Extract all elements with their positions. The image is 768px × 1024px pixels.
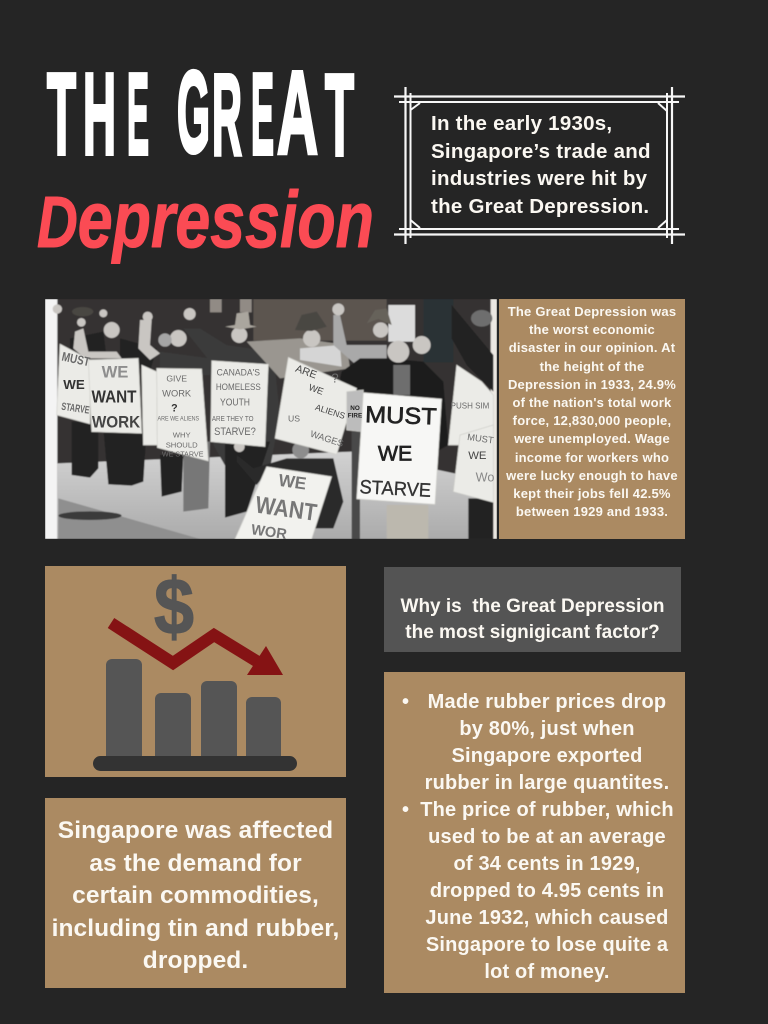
Singapore impact text panel: including tin and rubber, bbox=[52, 914, 339, 942]
placard lettering: WANT bbox=[92, 386, 137, 406]
placard lettering: WORK bbox=[92, 413, 140, 432]
statistics text panel: between 1929 and 1933. bbox=[516, 504, 668, 519]
statistics text panel: disaster in our opinion. At bbox=[509, 340, 675, 355]
placard lettering: STARVE bbox=[359, 477, 432, 502]
placard lettering: NO bbox=[350, 405, 360, 412]
decorative frame bbox=[394, 87, 685, 244]
statistics text panel: kept their jobs fell 42.5% bbox=[513, 486, 671, 501]
placard lettering: WE bbox=[63, 377, 85, 392]
statistics text panel: Depression in 1933, 24.9% bbox=[508, 377, 676, 392]
bullet: price of rubber: of 34 cents in 1929, bbox=[453, 853, 641, 875]
statistics text panel: force, 12,830,000 people, bbox=[513, 413, 671, 428]
placard lettering: ? bbox=[171, 403, 178, 415]
placard lettering: ARE bbox=[294, 363, 318, 382]
statistics text panel: the worst economic bbox=[529, 322, 655, 337]
bullet: rubber prices: rubber in large quantites. bbox=[425, 772, 669, 794]
Singapore impact text panel: Singapore was affected bbox=[58, 817, 333, 844]
placard lettering: WE bbox=[277, 470, 308, 494]
intro text bbox=[431, 112, 651, 218]
bullet: rubber prices: by 80%, just when bbox=[459, 718, 635, 740]
placard lettering: WAGES bbox=[309, 429, 345, 449]
Singapore impact text panel: certain commodities, bbox=[72, 882, 319, 909]
statistics text panel: of the nation's total work bbox=[512, 395, 672, 410]
Singapore impact text panel: dropped. bbox=[143, 947, 248, 974]
bullet: rubber prices bbox=[402, 691, 669, 794]
placard lettering: WORK bbox=[162, 389, 192, 399]
placard lettering: ARE THEY TO bbox=[212, 414, 254, 423]
hats bbox=[72, 307, 492, 442]
placard lettering: CANADA'S bbox=[217, 368, 260, 378]
placard lettering: SHOULD bbox=[166, 441, 198, 450]
bullet: price of rubber: lot of money. bbox=[484, 961, 610, 983]
chart base bbox=[93, 756, 297, 771]
placard lettering: WE bbox=[307, 382, 325, 397]
bullet: rubber prices: Singapore exported bbox=[451, 745, 643, 767]
rubber price bullet panel: • bbox=[402, 691, 409, 713]
protest photograph bbox=[45, 299, 497, 539]
placard lettering: WE bbox=[378, 442, 412, 466]
panel: falling chart icon bbox=[45, 566, 346, 777]
statistics text panel: income for workers who bbox=[515, 450, 669, 465]
bullet: price of rubber: dropped to 4.95 cents in bbox=[430, 880, 664, 902]
placard lettering: WANT bbox=[254, 492, 319, 527]
statistics text panel bbox=[499, 299, 685, 539]
statistics text panel: were unemployed. Wage bbox=[514, 431, 670, 446]
question heading panel: Why is the Great Depression bbox=[401, 596, 664, 617]
intro text: industries were hit by bbox=[431, 167, 647, 190]
intro text: Singapore’s trade and bbox=[431, 140, 651, 162]
placard lettering: HOMELESS bbox=[216, 382, 261, 392]
bullet: price of rubber bbox=[402, 799, 674, 983]
placard lettering: WE bbox=[102, 362, 128, 381]
bullet: price of rubber: The price of rubber, which bbox=[420, 799, 674, 821]
title line: The Great bbox=[47, 47, 354, 180]
crowd figures bbox=[70, 305, 493, 539]
bullet: rubber prices: Made rubber prices drop bbox=[428, 691, 666, 713]
statistics text panel: the height of the bbox=[540, 359, 644, 374]
bullet: price of rubber: used to be at an average bbox=[428, 826, 666, 848]
placard lettering bbox=[61, 350, 494, 543]
photo background bbox=[45, 299, 497, 539]
rubber price bullet panel bbox=[384, 672, 685, 993]
title bbox=[37, 60, 374, 264]
placard lettering: ? bbox=[331, 370, 339, 385]
placard lettering: WHY bbox=[173, 431, 191, 440]
placard lettering: STARVE bbox=[61, 401, 90, 417]
placard lettering: YOUTH bbox=[220, 398, 250, 409]
placard lettering: STARVE? bbox=[214, 426, 256, 438]
placard lettering: MUST bbox=[61, 350, 91, 369]
question heading panel: the most signigicant factor? bbox=[405, 622, 660, 643]
placard lettering: PUSH SIM bbox=[451, 401, 490, 410]
intro text: the Great Depression. bbox=[431, 194, 649, 218]
question heading panel bbox=[384, 567, 681, 652]
statistics text panel: were lucky enough to have bbox=[506, 468, 678, 483]
bullet: price of rubber: Singapore to lose quite a bbox=[426, 934, 668, 956]
placard lettering: ARE WE ALIENS bbox=[158, 415, 199, 422]
arrow: downward trend bbox=[111, 623, 258, 663]
statistics text panel: The Great Depression was bbox=[508, 304, 676, 319]
bars bbox=[106, 659, 281, 756]
placards bbox=[57, 344, 493, 539]
Singapore impact text panel bbox=[45, 798, 346, 988]
placard lettering: MUST bbox=[467, 432, 494, 446]
placard lettering: FIRE bbox=[348, 413, 362, 420]
rubber price bullet panel: • bbox=[402, 799, 409, 821]
faces and fists bbox=[53, 303, 431, 458]
placard lettering: Wo bbox=[476, 471, 494, 485]
bullet: price of rubber: June 1932, which caused bbox=[425, 907, 669, 929]
icon: declining bar chart with dollar sign bbox=[93, 566, 297, 771]
placard lettering: US bbox=[288, 414, 300, 424]
placard lettering: GIVE bbox=[166, 374, 187, 384]
Singapore impact text panel: as the demand for bbox=[89, 850, 302, 876]
intro text: In the early 1930s, bbox=[431, 112, 612, 135]
intro callout with double frame bbox=[394, 87, 685, 244]
placard lettering: MUST bbox=[365, 401, 437, 430]
placard lettering: WE STARVE bbox=[162, 449, 204, 458]
placard lettering: ALIENS bbox=[314, 402, 347, 421]
placard lettering: WE bbox=[468, 450, 487, 462]
